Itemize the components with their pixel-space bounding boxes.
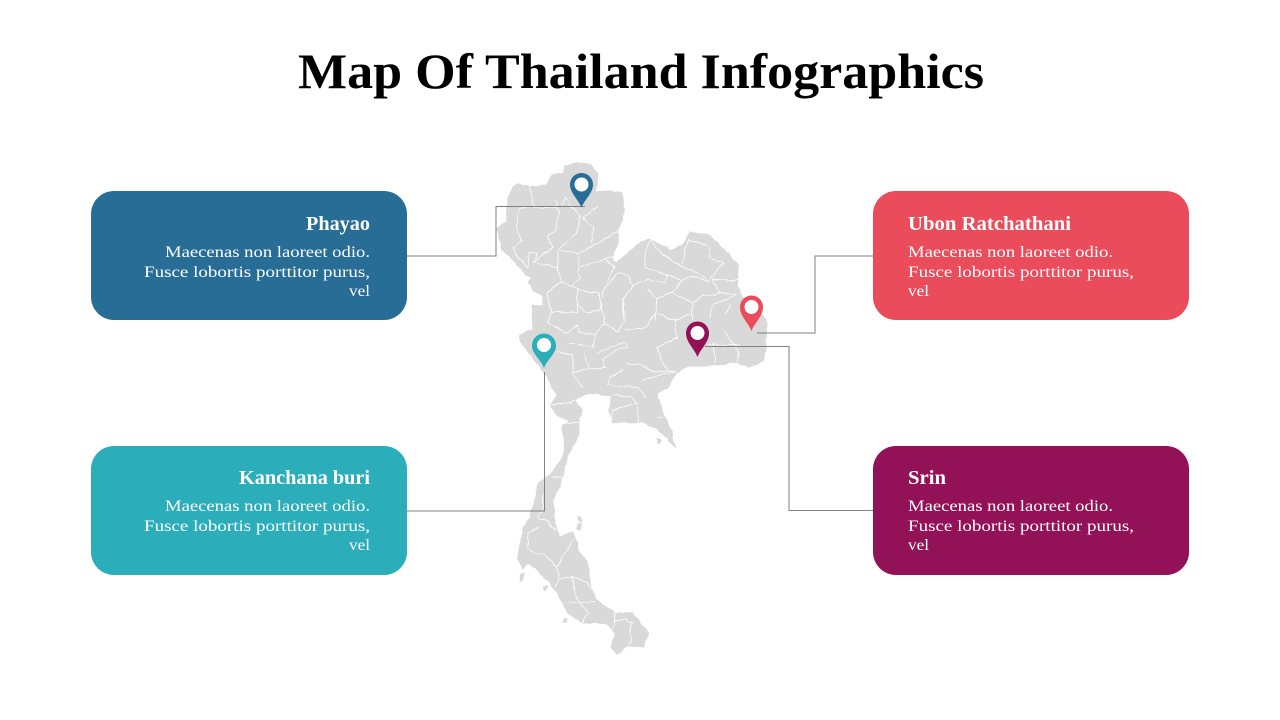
heading: Phayao: Phayao: [306, 214, 370, 235]
pin: Ubon Ratchathani: [740, 296, 763, 331]
panel: Phayao: [91, 191, 407, 320]
connector: Srin: [705, 346, 873, 510]
map outline: [497, 163, 767, 654]
pin: Phayao: [570, 173, 593, 208]
body text: Kanchana buri: [144, 498, 371, 554]
body text: Phayao: Maecenas non laoreet odio.: [165, 244, 370, 261]
body text: Kanchana buri: Maecenas non laoreet odio.: [165, 498, 370, 515]
body text: Phayao: Fusce lobortis porttitor purus,: [144, 264, 370, 281]
pin: Kanchana buri: [532, 334, 556, 368]
panel: Srin: [873, 446, 1189, 575]
connector: Ubon Ratchathani: [757, 256, 873, 333]
body text: Srin: vel: [908, 537, 930, 554]
body text: Srin: [908, 498, 1134, 554]
body text: Kanchana buri: Fusce lobortis porttitor purus,: [144, 518, 370, 535]
heading: Ubon Ratchathani: Ubon Ratchathani: [908, 214, 1072, 235]
body text: Srin: Maecenas non laoreet odio.: [908, 498, 1113, 515]
body text: Srin: Fusce lobortis porttitor purus,: [908, 518, 1134, 535]
connector: Kanchana buri: [407, 372, 544, 511]
title: Map Of Thailand Infographics: [298, 43, 984, 99]
connector: Phayao: [407, 206, 585, 256]
body text: Kanchana buri: vel: [349, 537, 371, 554]
body text: Ubon Ratchathani: Fusce lobortis porttitor purus,: [908, 264, 1134, 281]
body text: Ubon Ratchathani: Maecenas non laoreet odio.: [908, 244, 1113, 261]
pin: Srin: [686, 322, 709, 357]
panel: Kanchana buri: [91, 446, 407, 575]
map of Thailand: [497, 163, 767, 654]
heading: Kanchana buri: Kanchana buri: [239, 468, 371, 489]
body text: Ubon Ratchathani: vel: [908, 283, 930, 300]
body text: Phayao: [144, 244, 371, 300]
heading: Srin: Srin: [908, 468, 946, 489]
body text: Ubon Ratchathani: [908, 244, 1134, 300]
panel: Ubon Ratchathani: [873, 191, 1189, 320]
province borders: [513, 188, 740, 645]
body text: Phayao: vel: [349, 283, 371, 300]
